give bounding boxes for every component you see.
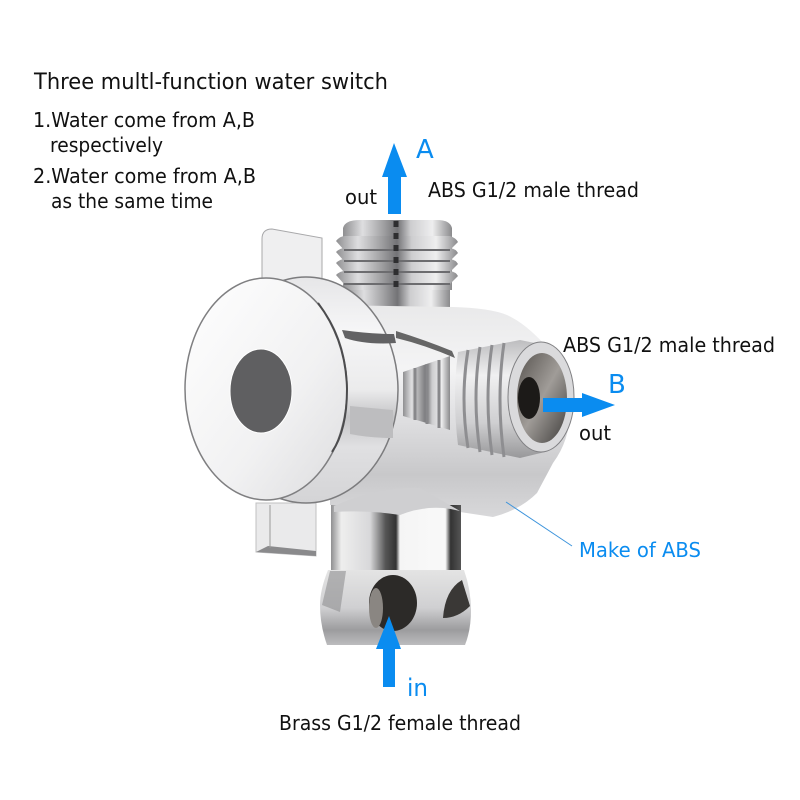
body dark band [396,331,455,358]
disc edge shadow [318,303,347,452]
label top thread: ABS G1/2 male thread [428,178,639,202]
arrow in [376,616,401,687]
label B: B [608,370,626,400]
lower handle tab [256,503,316,556]
main valve body [330,305,570,517]
label in: in [407,674,428,702]
label make of ABS: Make of ABS [579,538,701,562]
hex nut [320,570,471,645]
rear ring [214,277,398,503]
text block: water modes: 2.Water come from A,B [33,164,256,188]
title: Three multl-function water switch [33,70,388,95]
small threaded neck [403,356,450,430]
top threaded outlet [336,220,458,309]
label out right: out [579,421,611,445]
label out top: out [345,185,377,209]
product photo: three-way valve [185,220,574,645]
bottom cylinder [331,505,461,570]
right threaded outlet [455,340,574,458]
text block: water modes: respectively [50,133,163,157]
text block: water modes: 1.Water come from A,B [33,108,255,132]
ring lower reflection [350,406,393,438]
label right thread: ABS G1/2 male thread [563,333,775,357]
arrow A [382,143,407,214]
upper handle tab [262,229,322,285]
text block: water modes [33,108,256,213]
ring dark reflection [342,330,396,343]
leader line [506,502,572,546]
arrow B [543,393,615,417]
front disc [185,278,347,500]
label A: A [416,135,434,165]
body lower lip [334,488,460,515]
text block: water modes: as the same time [51,189,213,213]
grey centre button [230,349,292,433]
label brass thread: Brass G1/2 female thread [279,711,521,735]
